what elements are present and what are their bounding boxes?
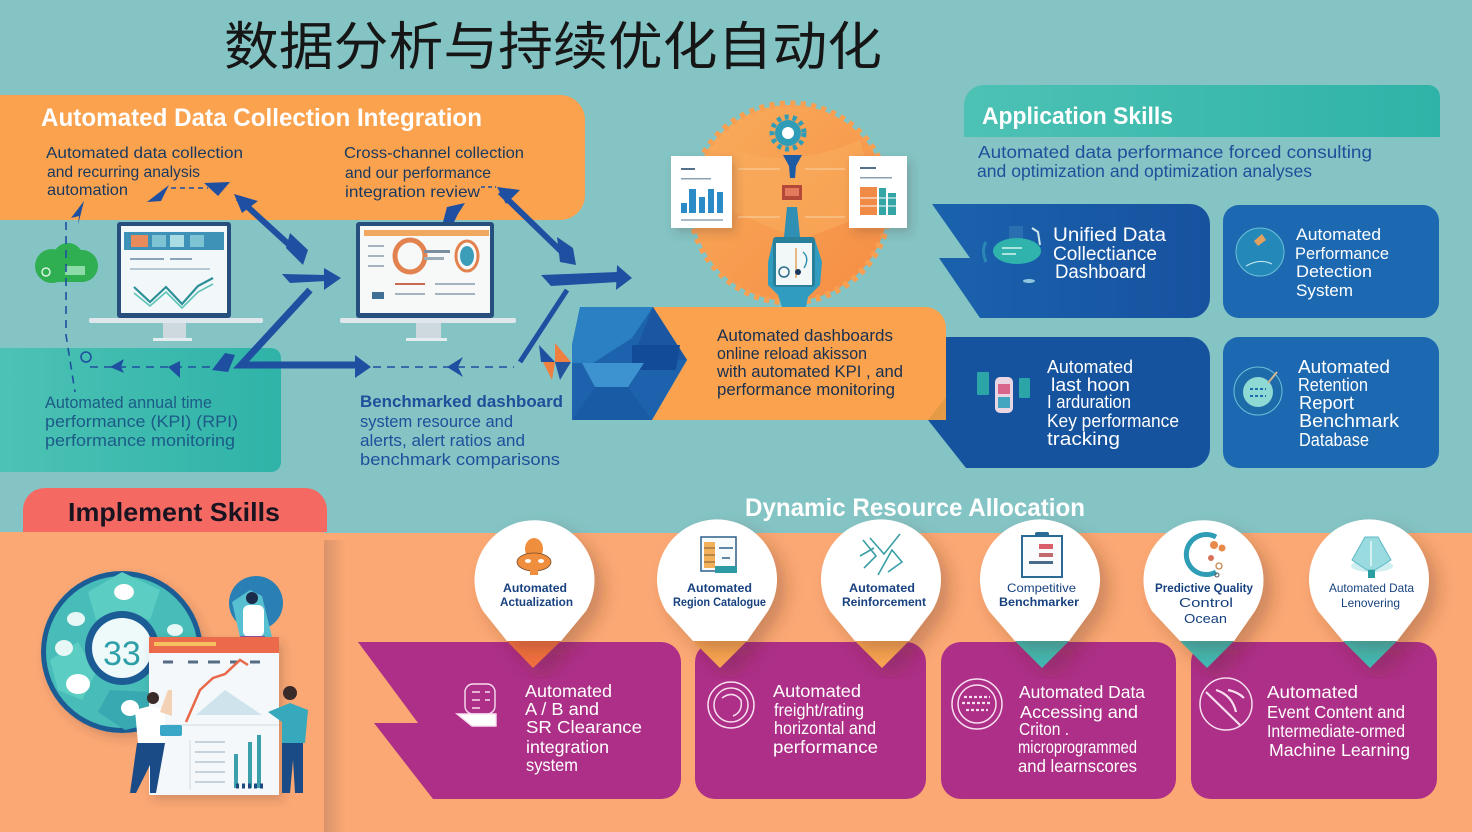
- text block: card label: Automated: [1296, 225, 1381, 244]
- panel: automated data collection header: [0, 95, 585, 220]
- arrow: horizontal to dashboard panel: [520, 265, 632, 362]
- text block: card label: horizontal and: [774, 718, 876, 738]
- pin: automated actualization: [474, 520, 594, 668]
- pin: automated region catalogue: [657, 519, 777, 668]
- text block: card label: Automated: [1047, 357, 1133, 377]
- illustration: skills wheel: 33: [103, 635, 141, 673]
- icon: clipboard: [1022, 532, 1062, 577]
- card: purple automated data: [941, 642, 1176, 799]
- text block: card label: Machine Learning: [1269, 740, 1410, 760]
- pin: automated region catalogue: Region Catalogue: [673, 595, 766, 609]
- icon: teal data capsule: [984, 226, 1041, 283]
- pin: automated reinforcement: [821, 519, 941, 668]
- text block: card label: Detection: [1296, 262, 1372, 281]
- text block: card label: Key performance: [1047, 411, 1179, 431]
- panel: automated dashboards callout: [572, 307, 946, 420]
- text block: card label: Automated Data: [1019, 682, 1145, 702]
- text block: card label: System: [1296, 281, 1353, 300]
- icon: phones: [977, 372, 1030, 413]
- icon: predictive swirl: [1186, 534, 1226, 577]
- icon: red report box: [782, 185, 802, 200]
- text block: card label: Unified Data: [1053, 225, 1166, 246]
- pin: automated data lenovering: Lenovering: [1341, 596, 1400, 610]
- text block: KPI performance monitoring: [45, 393, 238, 450]
- text block: automated dashboards: with automated KPI , and: [716, 363, 903, 381]
- text block: cross-channel collection: [344, 145, 524, 201]
- text block: automated dashboards: performance monitoring: [717, 381, 895, 399]
- text block: automated dashboards: online reload akisson: [717, 345, 867, 363]
- icon: teal line cross: [860, 534, 902, 575]
- text block: card label: freight/rating: [774, 700, 864, 720]
- pin: automated reinforcement: Reinforcement: [842, 595, 926, 609]
- text block: card label: Automated: [1298, 357, 1390, 377]
- text block: card label: Benchmark: [1299, 411, 1400, 431]
- icon: teal pyramid: [1351, 537, 1393, 578]
- text block: card label: Intermediate-ormed: [1267, 721, 1405, 741]
- arrow: dashed return lines: [81, 352, 514, 378]
- panel: performance monitoring: [0, 348, 281, 472]
- chart: blue bar report: [671, 156, 732, 228]
- text block: card label: A / B and: [525, 699, 599, 719]
- text block: card label: Accessing and: [1020, 702, 1138, 722]
- pin: predictive quality control ocean: Predictive Quality: [1155, 581, 1253, 595]
- text block: application skills description: and optimization and optimization analyses: [977, 161, 1312, 181]
- text block: card label: [1018, 682, 1145, 776]
- icon: hand holding device: [457, 684, 496, 726]
- text block: card label: Criton .: [1019, 719, 1069, 739]
- text block: card label: [1047, 357, 1179, 449]
- text block: card label: tracking: [1047, 429, 1120, 449]
- illustration: skills wheel: [41, 571, 203, 733]
- text block: card label: Report: [1299, 393, 1354, 413]
- heading tab: implement skills: Implement Skills: [68, 497, 280, 527]
- pin: automated data lenovering: Automated Data: [1329, 581, 1414, 595]
- arrow: thick diagonal right: [497, 187, 576, 265]
- panel: application skills header: [964, 85, 1440, 137]
- text block: benchmarked dashboard: benchmark comparisons: [360, 450, 560, 469]
- text block: card label: Performance: [1295, 244, 1389, 263]
- text block: card label: performance: [773, 737, 878, 757]
- arrow: dashed feedback loop left: [66, 182, 230, 392]
- card: unified data collectiance dashboard: [932, 204, 1210, 318]
- pin: automated region catalogue: Automated: [687, 581, 752, 595]
- card: purple machine learning: [1191, 642, 1437, 799]
- arrow: horizontal to laptop two: [282, 268, 341, 290]
- text block: data collection left: [46, 145, 243, 199]
- text block: KPI performance monitoring: performance (KPI) (RPI): [45, 412, 238, 431]
- text block: card label: I arduration: [1047, 392, 1131, 412]
- text block: card label: Automated: [1267, 682, 1358, 702]
- text block: card label: [773, 681, 878, 757]
- text block: data collection left: automation: [47, 182, 128, 199]
- icon: globe: [1236, 228, 1284, 276]
- card: purple A/B integration system: [358, 642, 681, 799]
- text block: data collection left: Automated data collection: [46, 145, 243, 162]
- icon: database document: [701, 537, 737, 573]
- panel: implement skills: [0, 488, 346, 832]
- arrow: thick diagonal to laptop one: [234, 194, 308, 265]
- text block: card label: Dashboard: [1055, 262, 1146, 283]
- text block: card label: Retention: [1298, 375, 1368, 395]
- illustration: sunburst with gear, reports and tablet: [671, 104, 907, 307]
- text block: application skills description: [977, 142, 1372, 181]
- illustration: dashboard with two people: [130, 576, 308, 795]
- chart: orange and teal bar report: [849, 156, 907, 228]
- text block: card label: microprogrammed: [1018, 737, 1137, 757]
- pin: automated actualization: Automated: [503, 581, 567, 595]
- icon: data orb: [1234, 367, 1282, 415]
- text block: automated dashboards: [716, 327, 903, 399]
- title: 数据分析与持续优化自动化: [224, 19, 882, 77]
- text block: benchmarked dashboard: system resource and: [360, 412, 513, 431]
- pin: competitive benchmarker: [980, 519, 1100, 668]
- pin: predictive quality control ocean: Control: [1179, 595, 1233, 610]
- text block: card label: Collectiance: [1053, 244, 1157, 265]
- arrow: large Z connector: [212, 290, 371, 378]
- text block: card label: SR Clearance: [526, 717, 642, 737]
- text block: cross-channel collection: Cross-channel collection: [344, 145, 524, 162]
- pin: predictive quality control ocean: Ocean: [1184, 611, 1227, 626]
- text block: card label: Automated: [525, 681, 612, 701]
- icon: tool in circle: [1200, 678, 1252, 730]
- person left: [130, 690, 182, 793]
- text block: card label: [1298, 357, 1400, 450]
- person right: [268, 686, 308, 793]
- icon: orange tree: [517, 538, 551, 575]
- icon: circular gauge: [708, 682, 754, 728]
- card: automated performance detection system: [1223, 205, 1439, 318]
- icon: data seal: [952, 679, 1002, 729]
- card: automated retention report benchmark database: [1223, 337, 1439, 468]
- icon: blue faceted hexagon: [572, 307, 687, 420]
- text block: card label: Event Content and: [1267, 702, 1405, 722]
- text block: card label: last hoon: [1051, 375, 1130, 395]
- icon: pinwheel: [539, 343, 571, 380]
- text block: card label: and learnscores: [1018, 756, 1137, 776]
- text block: benchmarked dashboard: Benchmarked dashboard: [360, 392, 563, 411]
- pin: automated reinforcement: Automated: [849, 581, 915, 595]
- text block: card label: [525, 681, 642, 775]
- card: purple automated performance: [695, 642, 926, 799]
- icon: green cloud: [35, 243, 98, 283]
- pin: automated actualization: Actualization: [500, 595, 573, 609]
- pin: predictive quality control ocean: [1144, 520, 1264, 668]
- dashboard board: [149, 637, 279, 795]
- heading tab: implement skills: [23, 488, 327, 532]
- text block: benchmarked dashboard: alerts, alert ratios and: [360, 431, 525, 450]
- text block: card label: [1267, 682, 1410, 760]
- pin: automated data lenovering: [1309, 519, 1429, 668]
- person on top of dashboard: [229, 576, 283, 667]
- text block: cross-channel collection: and our performance: [345, 165, 491, 182]
- heading: automated data collection integration: Automated Data Collection Integration: [41, 104, 482, 132]
- text block: KPI performance monitoring: performance monitoring: [45, 431, 235, 450]
- text block: cross-channel collection: integration review: [345, 184, 480, 201]
- text block: application skills description: Automated data performance forced consulting: [978, 142, 1372, 162]
- text block: card label: [1295, 225, 1389, 300]
- text block: data collection left: and recurring analysis: [47, 164, 200, 181]
- pin: competitive benchmarker: Competitive: [1007, 581, 1076, 595]
- icon: laptop with line chart: [89, 222, 263, 341]
- text block: card label: integration: [526, 737, 609, 757]
- heading: dynamic resource allocation: Dynamic Resource Allocation: [745, 494, 1085, 522]
- text block: card label: Automated: [773, 681, 861, 701]
- text block: card label: Database: [1299, 430, 1369, 450]
- text block: card label: [1053, 225, 1166, 283]
- pin: competitive benchmarker: Benchmarker: [999, 595, 1079, 609]
- text block: KPI performance monitoring: Automated annual time: [45, 393, 212, 412]
- arrow: small head above laptop two: [443, 187, 496, 222]
- text block: benchmarked dashboard: [360, 392, 563, 469]
- icon: laptop with donut charts: [340, 222, 516, 341]
- text block: automated dashboards: Automated dashboards: [717, 327, 893, 345]
- card: automated key performance tracking: [928, 337, 1210, 468]
- heading: application skills: Application Skills: [982, 103, 1173, 130]
- icon: tablet on stand: [768, 207, 822, 307]
- icon: gear: [772, 117, 804, 178]
- text block: card label: system: [526, 755, 578, 775]
